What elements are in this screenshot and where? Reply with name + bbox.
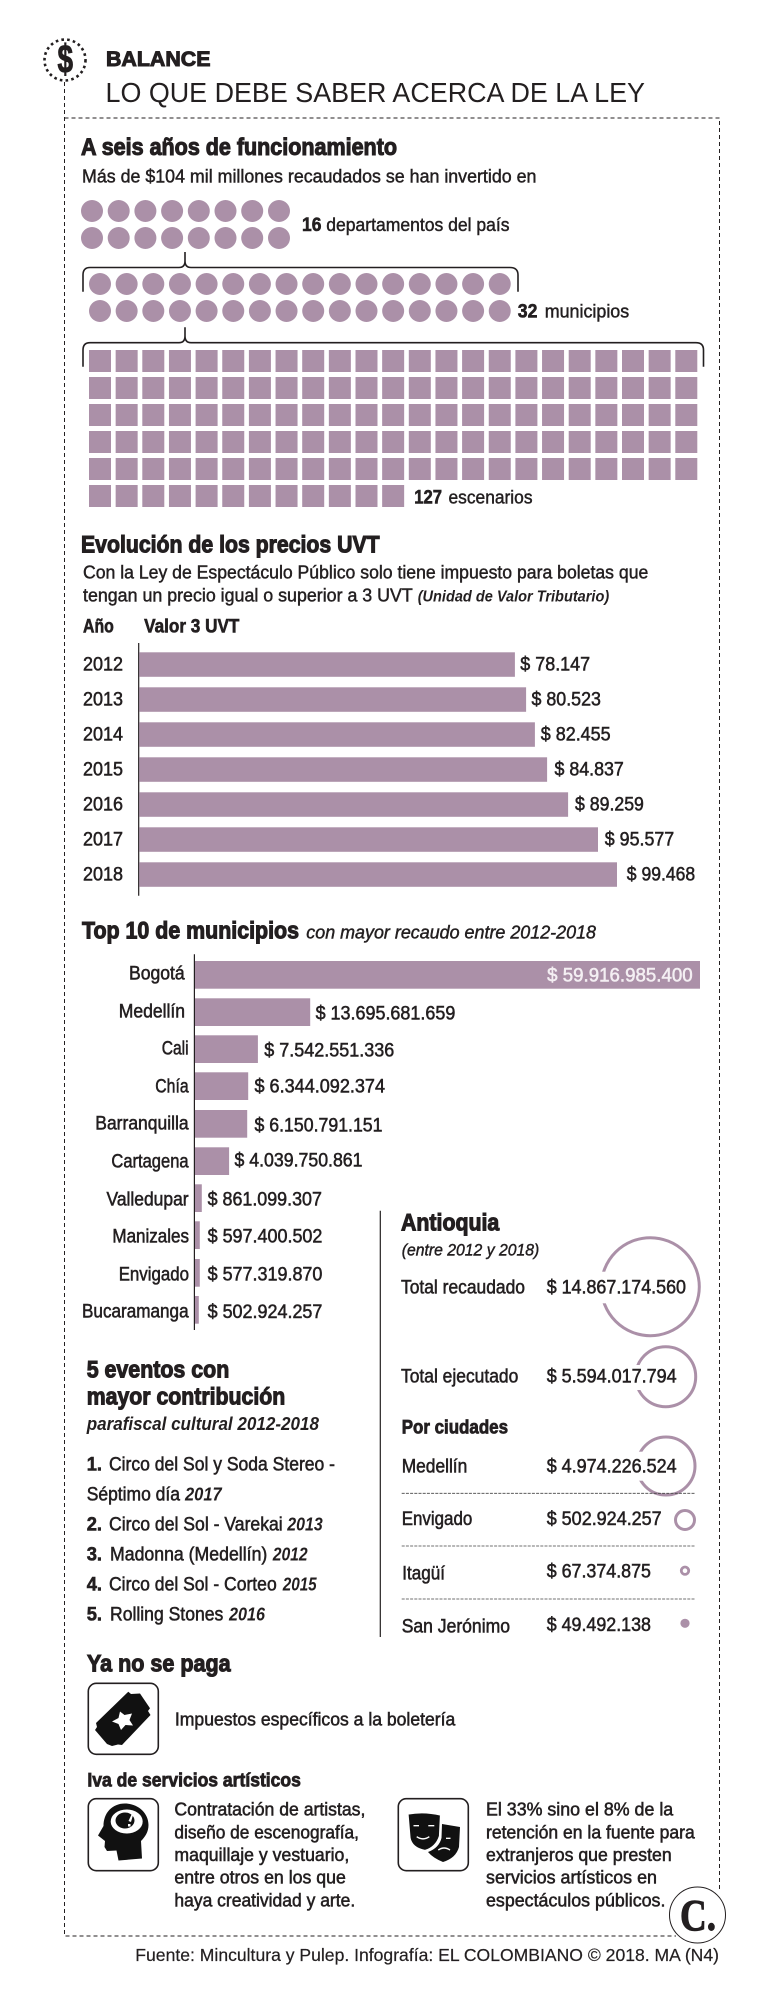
bar: Envigado xyxy=(119,1259,323,1287)
list item 1: Séptimo día xyxy=(87,1484,180,1506)
row: Itagüí: Itagüí xyxy=(402,1562,446,1584)
label: 32 municipios: municipios xyxy=(545,302,629,322)
text: retención: El 33% sino el 8% de la xyxy=(486,1799,674,1820)
panel: top 10 de municipios xyxy=(82,917,700,1330)
bracket: municipios to escenarios xyxy=(83,327,704,367)
bar: 2017: 2017 xyxy=(83,829,123,851)
bar: 2014: 2014 xyxy=(83,724,123,746)
squares: 127 escenarios xyxy=(89,350,697,507)
column headers: Valor 3 UVT xyxy=(144,617,240,638)
outer dashed frame xyxy=(64,82,720,1936)
bar: Chía xyxy=(155,1072,385,1100)
label: 127 escenarios: escenarios xyxy=(448,487,532,507)
label: 127 escenarios xyxy=(414,487,532,508)
list item 2: 2013 xyxy=(286,1515,323,1535)
heading: Antioquia xyxy=(401,1210,500,1237)
text: impuestos: Impuestos específicos a la boletería xyxy=(175,1709,456,1730)
row: San Jerónimo xyxy=(402,1614,690,1638)
bar: Bucaramanga xyxy=(82,1296,322,1324)
list item 4: Circo del Sol - Corteo xyxy=(109,1574,277,1596)
icon: dollar badge: $ xyxy=(58,38,73,82)
label: 127 escenarios: 127 xyxy=(414,487,442,508)
panel: ya no se paga xyxy=(87,1651,456,1754)
row: Envigado: $ 502.924.257 xyxy=(547,1508,662,1530)
bar: Manizales: Manizales xyxy=(112,1226,189,1248)
intro text: Con la Ley de Espectáculo Público solo tiene impuesto para boletas que xyxy=(83,562,648,582)
heading xyxy=(401,1210,539,1260)
logo: El Colombiano C xyxy=(670,1887,726,1943)
bar: 2012: 2012 xyxy=(83,654,123,676)
bar: 2012 xyxy=(83,652,590,677)
row: Envigado xyxy=(402,1508,694,1530)
bar: 2017: $ 95.577 xyxy=(605,829,674,851)
heading: Ya no se paga xyxy=(87,1651,231,1678)
list item 2: 2. xyxy=(87,1515,102,1536)
bar: Bogotá: Bogotá xyxy=(129,962,185,984)
bar: Cartagena: Cartagena xyxy=(111,1150,189,1172)
bar: Barranquilla xyxy=(95,1110,383,1138)
row: Medellín: $ 4.974.226.524 xyxy=(547,1456,677,1478)
row: Envigado: Envigado xyxy=(402,1508,472,1530)
icon: head xyxy=(88,1799,158,1871)
intro text: (Unidad de Valor Tributario) xyxy=(418,589,609,606)
bar: Medellín: $ 13.695.681.659 xyxy=(316,1002,455,1024)
title: LO QUE DEBE SABER ACERCA DE LA LEY xyxy=(106,77,645,108)
row: total recaudado: Total recaudado xyxy=(401,1276,525,1298)
panel: iva de servicios artísticos xyxy=(87,1771,695,1910)
dots: 16 departamentos xyxy=(81,200,290,249)
bar: 2015 xyxy=(83,757,624,782)
panel: evolución de los precios UVT xyxy=(81,532,695,896)
bar: 2018: $ 99.468 xyxy=(627,864,695,886)
panel: a seis años de funcionamiento xyxy=(81,134,704,508)
list item 2: Circo del Sol - Varekai xyxy=(109,1514,283,1536)
bar: Chía: Chía xyxy=(155,1075,189,1097)
bar: Bogotá: $ 59.916.985.400 xyxy=(547,965,693,987)
text: retención: extranjeros que presten xyxy=(486,1844,672,1865)
heading: A seis años de funcionamiento xyxy=(81,134,397,161)
list item 3: 2012 xyxy=(272,1545,308,1565)
icon: dollar badge xyxy=(44,38,86,82)
heading xyxy=(82,917,596,944)
icon: ticket xyxy=(88,1683,158,1754)
bar: Bucaramanga: Bucaramanga xyxy=(82,1300,189,1322)
text: contratación xyxy=(174,1799,365,1910)
text: retención: espectáculos públicos. xyxy=(486,1889,665,1910)
axis xyxy=(193,954,195,1330)
row: total ejecutado: Total ejecutado xyxy=(401,1366,518,1388)
label: 16 departamentos: 16 xyxy=(302,215,321,236)
bar: 2016: $ 89.259 xyxy=(575,794,644,816)
bar: Valledupar: $ 861.099.307 xyxy=(208,1189,322,1211)
row: Medellín xyxy=(402,1437,695,1495)
bar: Bucaramanga: $ 502.924.257 xyxy=(208,1301,322,1323)
bar: Manizales: $ 597.400.502 xyxy=(208,1226,322,1248)
column headers xyxy=(83,617,240,638)
panel divider xyxy=(379,1211,381,1637)
text: contratación: entre otros en los que xyxy=(174,1867,346,1888)
list item 5: 5. xyxy=(87,1605,102,1626)
label: 32 municipios: 32 xyxy=(518,302,537,323)
list item 1: 2017 xyxy=(184,1485,223,1505)
list item 1: 1. xyxy=(87,1455,102,1476)
heading xyxy=(86,1356,319,1434)
row: total recaudado: $ 14.867.174.560 xyxy=(547,1276,686,1298)
bar: Cartagena: $ 4.039.750.861 xyxy=(234,1150,362,1172)
heading: mayor contribución xyxy=(87,1383,285,1410)
list item 1: Circo del Sol y Soda Stereo - xyxy=(109,1454,335,1476)
heading: Evolución de los precios UVT xyxy=(81,532,380,559)
bar: 2015: 2015 xyxy=(83,759,123,781)
list item 3: 3. xyxy=(87,1545,102,1566)
label: 16 departamentos: departamentos del país xyxy=(326,215,510,235)
axis xyxy=(138,643,140,896)
list item 5: 2016 xyxy=(228,1605,266,1625)
bar: Valledupar: Valledupar xyxy=(106,1188,189,1210)
text: retención: servicios artísticos en xyxy=(486,1867,657,1888)
heading: con mayor recaudo entre 2012-2018 xyxy=(306,922,596,942)
intro text xyxy=(83,562,648,606)
bar: 2018 xyxy=(83,862,695,887)
text: contratación: Contratación de artistas, xyxy=(174,1799,365,1820)
bar: 2012: $ 78.147 xyxy=(520,654,590,676)
row: total ejecutado xyxy=(401,1347,696,1407)
row: San Jerónimo: $ 49.492.138 xyxy=(547,1614,651,1636)
bar: Bogotá xyxy=(129,961,700,989)
text: retención: retención en la fuente para xyxy=(486,1821,695,1842)
bar: Barranquilla: Barranquilla xyxy=(95,1112,189,1134)
row: Medellín: Medellín xyxy=(402,1456,467,1478)
list item 1 xyxy=(87,1454,335,1506)
bar: 2015: $ 84.837 xyxy=(554,759,624,781)
bar: 2013 xyxy=(83,687,601,712)
heading: Top 10 de municipios xyxy=(82,917,299,944)
bar: 2014: $ 82.455 xyxy=(541,724,611,746)
icon: theatre masks xyxy=(398,1799,468,1871)
bar: Medellín: Medellín xyxy=(119,1000,185,1022)
heading: (entre 2012 y 2018) xyxy=(402,1241,539,1260)
text: contratación: maquillaje y vestuario, xyxy=(174,1844,349,1865)
bar: 2016 xyxy=(83,792,644,817)
bar: Cali xyxy=(162,1035,394,1063)
title: BALANCE xyxy=(106,48,210,71)
intro text: tengan un precio igual o superior a 3 UVT xyxy=(83,586,413,606)
subheading: Más de $104 mil millones recaudados se han invertido en xyxy=(82,167,536,187)
bar: Barranquilla: $ 6.150.791.151 xyxy=(254,1115,382,1137)
row: total recaudado xyxy=(401,1238,699,1336)
bar: Medellín xyxy=(119,998,455,1026)
bar: Cartagena xyxy=(111,1147,363,1175)
row: Itagüí: $ 67.374.875 xyxy=(547,1561,651,1583)
list item 3: Madonna (Medellín) xyxy=(110,1544,267,1566)
source credit: Fuente: Mincultura y Pulep. Infografía: EL COLOMBIANO © 2018. MA (N4) xyxy=(135,1945,719,1965)
title xyxy=(106,48,645,108)
heading: parafiscal cultural 2012-2018 xyxy=(86,1414,319,1434)
bar: Envigado: $ 577.319.870 xyxy=(208,1264,323,1286)
bar: Chía: $ 6.344.092.374 xyxy=(254,1076,385,1098)
logo: El Colombiano C: C. xyxy=(680,1891,716,1940)
bar: 2014 xyxy=(83,722,611,747)
heading: Iva de servicios artísticos xyxy=(87,1771,301,1792)
bar: Valledupar xyxy=(106,1184,322,1212)
bar: Manizales xyxy=(112,1221,322,1249)
list item 5: Rolling Stones xyxy=(110,1604,224,1626)
column headers: Año xyxy=(83,617,114,638)
row: total ejecutado: $ 5.594.017.794 xyxy=(547,1366,677,1388)
list item 4: 2015 xyxy=(282,1575,318,1595)
bracket: departamentos to municipios xyxy=(83,252,518,292)
heading: 5 eventos con xyxy=(87,1356,229,1383)
bar: 2018: 2018 xyxy=(83,864,123,886)
dots: 32 municipios xyxy=(89,273,511,322)
list item 4: 4. xyxy=(87,1575,102,1596)
panel: Antioquia xyxy=(380,1210,699,1638)
text: retención xyxy=(486,1799,695,1910)
bar: Cali: $ 7.542.551.336 xyxy=(264,1040,394,1062)
text: contratación: haya creatividad y arte. xyxy=(174,1889,355,1910)
text: contratación: diseño de escenografía, xyxy=(174,1821,359,1842)
panel: 5 eventos con mayor contribución xyxy=(86,1356,335,1626)
bar: 2013: $ 80.523 xyxy=(532,689,601,711)
row: San Jerónimo: San Jerónimo xyxy=(402,1616,510,1638)
bar: 2013: 2013 xyxy=(83,689,123,711)
row: Itagüí xyxy=(402,1561,689,1584)
subheading: por ciudades: Por ciudades xyxy=(402,1417,508,1438)
bar: 2017 xyxy=(83,827,674,852)
bar: Envigado: Envigado xyxy=(119,1264,189,1286)
bar: Cali: Cali xyxy=(162,1037,189,1059)
bar: 2016: 2016 xyxy=(83,794,123,816)
